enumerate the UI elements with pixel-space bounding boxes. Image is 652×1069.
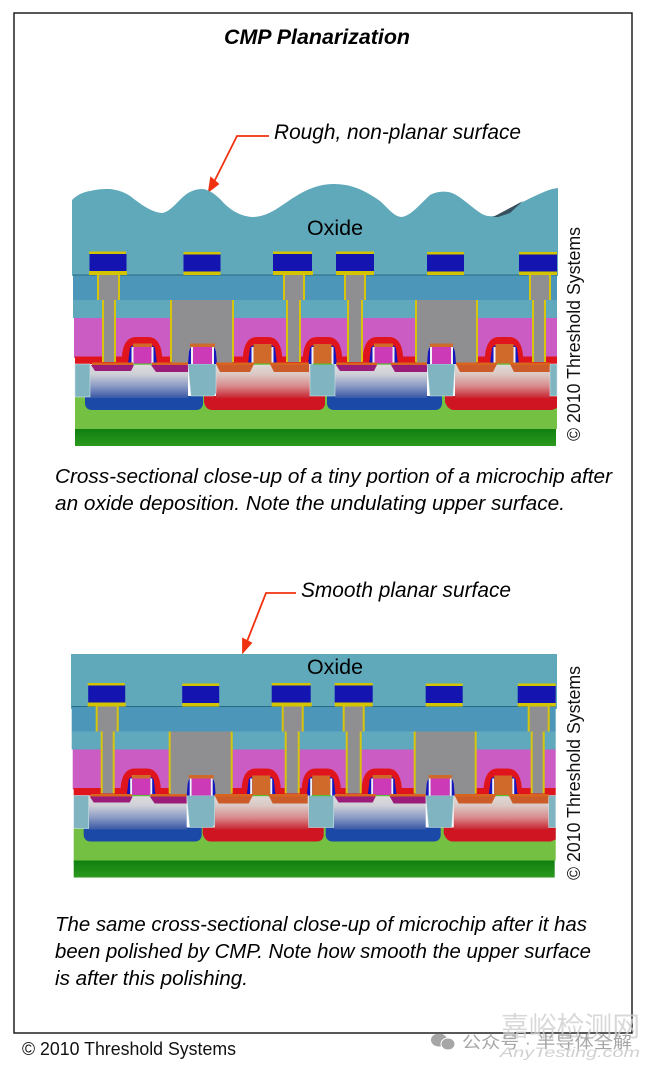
wells bbox=[85, 396, 557, 410]
icon: wechat bbox=[431, 1034, 455, 1050]
caption: first diagram bbox=[55, 465, 613, 515]
oxide main fill bbox=[73, 232, 557, 275]
narrow plugs bbox=[97, 275, 551, 362]
label: oxide: Oxide bbox=[307, 656, 363, 679]
metal lines bbox=[89, 252, 557, 275]
arrow: to rough surface bbox=[209, 136, 269, 191]
caption: first diagram: Cross-sectional close-up of a tiny portion of a microchip after bbox=[55, 465, 613, 488]
watermark bbox=[431, 1011, 640, 1060]
caption: second diagram: The same cross-sectional close-up of microchip after it has bbox=[55, 913, 587, 936]
layer: green substrate bbox=[75, 396, 557, 429]
contact landing strips bbox=[92, 362, 550, 365]
dark sliver on surface bbox=[493, 201, 523, 217]
caption: second diagram: been polished by CMP. Note how smooth the upper surface bbox=[55, 940, 591, 963]
layer: red liner bbox=[75, 356, 557, 364]
callout: smooth surface bbox=[243, 579, 511, 652]
gates with spacers bbox=[128, 344, 519, 365]
caption: second diagram bbox=[55, 913, 591, 990]
callout: rough surface bbox=[209, 120, 521, 191]
gate caps bbox=[122, 337, 523, 364]
source and drain regions bbox=[91, 364, 550, 372]
diagram: polished chip cross-section bbox=[71, 654, 557, 878]
watermark: 公众号 · 半导体全解 bbox=[462, 1033, 632, 1052]
lower chip layers bbox=[72, 664, 556, 878]
oxide layer with undulating surface bbox=[72, 184, 558, 276]
caption: second diagram: is after this polishing. bbox=[55, 967, 248, 990]
large contacts bbox=[170, 300, 478, 364]
callout: rough surface: Rough, non-planar surface bbox=[274, 120, 521, 144]
caption: first diagram: an oxide deposition. Note the undulating upper surface. bbox=[55, 492, 565, 515]
arrow: to smooth surface bbox=[243, 593, 296, 652]
vertical copyright: © 2010 Threshold Systems bbox=[564, 227, 584, 441]
vertical copyright: © 2010 Threshold Systems bbox=[564, 666, 584, 880]
layer: light oxide bbox=[73, 300, 557, 318]
title: CMP Planarization bbox=[224, 26, 410, 49]
layer: dark green base bbox=[75, 429, 556, 446]
silicon gradients bbox=[90, 364, 550, 398]
watermark: 嘉峪检测网 bbox=[501, 1011, 640, 1042]
label: oxide: Oxide bbox=[307, 217, 363, 240]
oxide layer with flat surface bbox=[71, 654, 557, 709]
diagram: rough chip cross-section bbox=[72, 184, 558, 446]
footer copyright: © 2010 Threshold Systems bbox=[22, 1039, 236, 1059]
layer: pink dielectric bbox=[74, 318, 557, 358]
watermark: AnyTesting.com bbox=[499, 1044, 640, 1060]
callout: smooth surface: Smooth planar surface bbox=[301, 579, 511, 602]
layer: dielectric bbox=[73, 275, 557, 300]
STI isolation bbox=[75, 364, 557, 397]
